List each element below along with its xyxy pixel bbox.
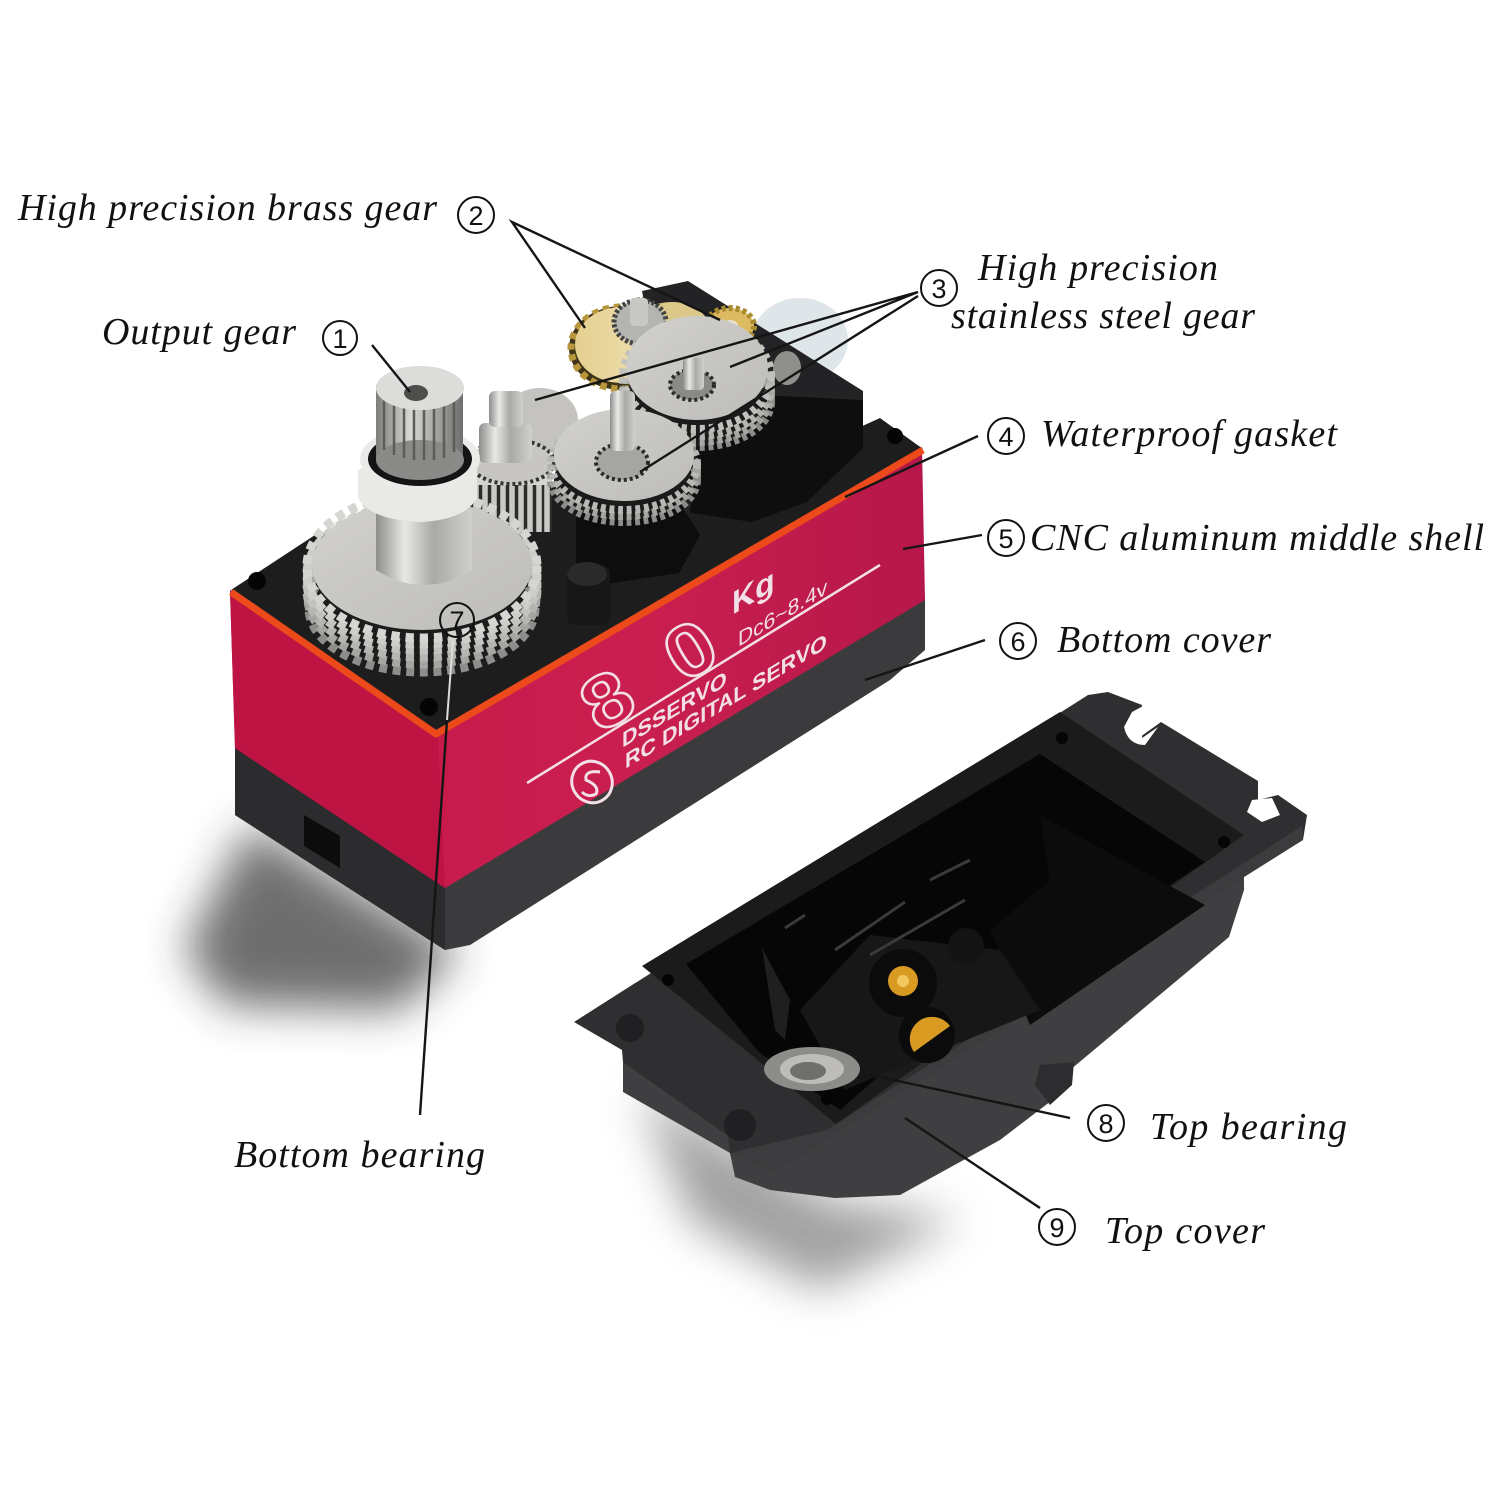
servo branding (527, 562, 880, 810)
red middle shell (230, 447, 925, 888)
label 7: bottom bearing (234, 603, 485, 1176)
label 5: CNC aluminum middle shell: CNC aluminum middle shell (1030, 517, 1484, 559)
panel: assembled servo (185, 281, 925, 1010)
connector window (304, 815, 340, 868)
output shaft (358, 366, 480, 585)
label 2: brass gear: 2 (468, 201, 484, 231)
orange waterproof gasket (231, 450, 923, 734)
upper steel gear (623, 316, 771, 447)
plate screws (248, 428, 903, 716)
label 2: brass gear (17, 187, 720, 328)
pale dome behind gearbox (752, 298, 848, 382)
label 7: bottom bearing: 7 (449, 606, 465, 636)
label 4: waterproof gasket (845, 413, 1338, 497)
middle pinion (470, 388, 578, 532)
80 kg rating: Kg (732, 562, 775, 622)
logo (564, 754, 620, 810)
label 2: brass gear: High precision brass gear (17, 187, 437, 229)
cover screw holes (662, 732, 1230, 1105)
top plate (231, 418, 923, 735)
small screw (773, 351, 801, 385)
black post (567, 565, 610, 625)
label 6: bottom cover (865, 619, 1271, 680)
cover nub (1035, 1062, 1074, 1105)
cover body (623, 800, 1303, 1198)
label 1: output gear: 1 (332, 324, 348, 354)
label 3: stainless steel gear: High precision (977, 247, 1218, 289)
label 5: CNC aluminum middle shell: 5 (998, 524, 1014, 554)
cover rim (642, 712, 1244, 1124)
label 1: output gear (102, 311, 410, 392)
label 8: top bearing: Top bearing (1150, 1106, 1347, 1148)
label 9: top cover: 9 (1049, 1213, 1065, 1243)
inner clip (762, 948, 790, 1040)
80 kg rating: 8 (566, 652, 649, 748)
brass insert upper (869, 949, 937, 1017)
inner ribs (785, 860, 970, 955)
label 1: output gear: Output gear (102, 311, 296, 353)
label 7: bottom bearing: Bottom bearing (234, 1134, 485, 1176)
flange slots (1124, 705, 1280, 822)
80 kg rating (566, 562, 828, 748)
label 3: stainless steel gear (535, 247, 1255, 472)
model rule (527, 565, 880, 783)
brass insert lower (899, 1007, 955, 1063)
servo branding: DSSERVO (622, 666, 727, 753)
label 3: stainless steel gear: 3 (931, 274, 947, 304)
label 9: top cover: Top cover (1105, 1210, 1265, 1252)
servo branding: RC DIGITAL SERVO (625, 628, 827, 774)
80 kg rating: 0 (649, 602, 732, 698)
lower steel gear (551, 391, 697, 522)
label 8: top bearing: 8 (1098, 1109, 1114, 1139)
top bearing (764, 1047, 860, 1091)
label 9: top cover (905, 1118, 1265, 1252)
label 4: waterproof gasket: 4 (998, 422, 1014, 452)
cover flange (574, 692, 1307, 1172)
label 8: top bearing (870, 1075, 1347, 1148)
brass gear (569, 302, 710, 390)
label 4: waterproof gasket: Waterproof gasket (1041, 413, 1338, 455)
80 kg rating: Dc6~8.4v (738, 574, 828, 652)
blind boss (948, 928, 984, 964)
gearbox housing (642, 281, 863, 522)
bottom cover (235, 595, 925, 950)
label 3: stainless steel gear: stainless steel gear (951, 295, 1255, 337)
cover shadow (640, 1090, 960, 1290)
black cylinder (576, 502, 700, 585)
shadow under servo (185, 825, 460, 1010)
panel: top cover (574, 692, 1307, 1290)
small brass gear (706, 308, 754, 344)
label 6: bottom cover: Bottom cover (1057, 619, 1271, 661)
cover cavity (686, 754, 1205, 1110)
large output gear (307, 494, 537, 672)
label 6: bottom cover: 6 (1010, 627, 1026, 657)
small silver gear (614, 298, 666, 344)
